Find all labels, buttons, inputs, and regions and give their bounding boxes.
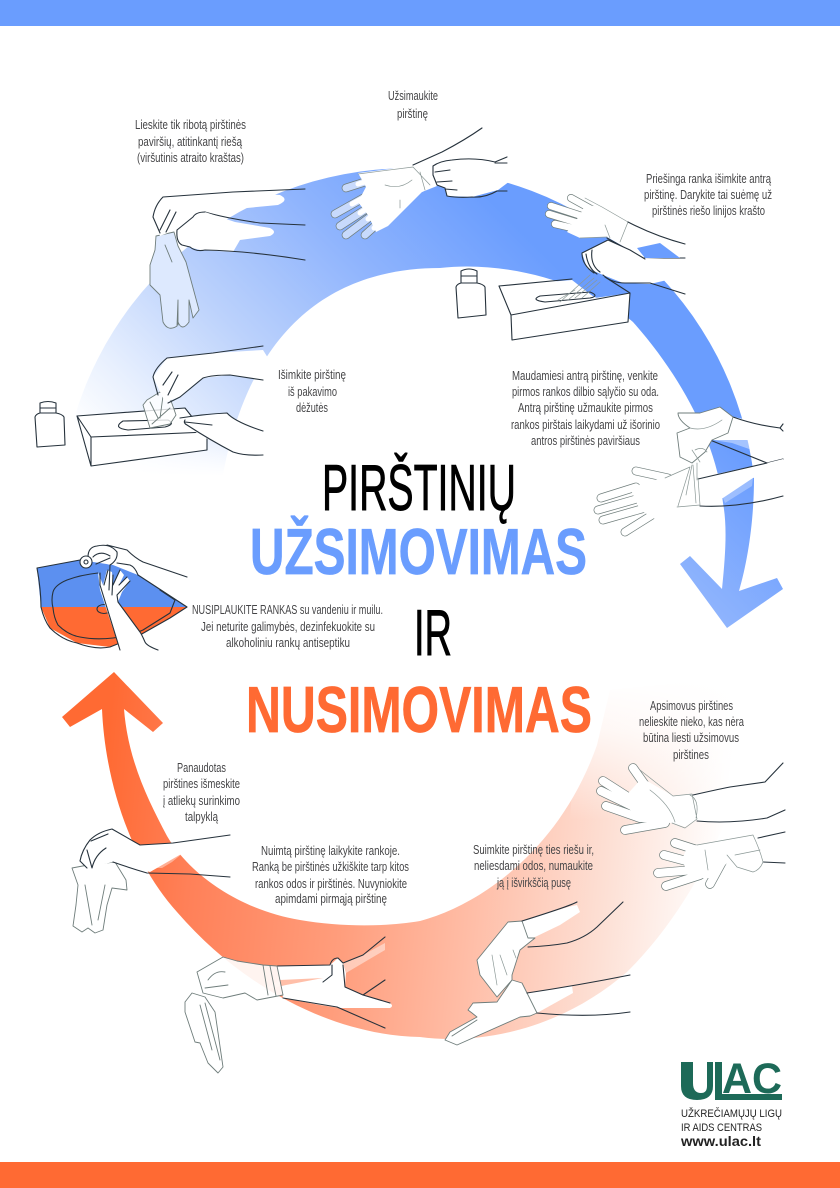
step: touch limited surface [135, 118, 305, 328]
caption: apimdami pirmąją pirštinę [275, 892, 387, 906]
icon: gloved fingers [335, 181, 396, 235]
icon: washing hand [98, 565, 158, 650]
icon: hanging glove [150, 232, 199, 328]
caption: rankos odos ir pirštinės. Nuvyniokite [255, 877, 407, 891]
caption [252, 844, 409, 906]
icon: bottle [35, 402, 65, 447]
caption: Ranką be pirštinės užkiškite tarp kitos [252, 860, 409, 874]
caption [163, 761, 240, 824]
title line: NUSIMOVIMAS: NUSIMOVIMAS [246, 673, 592, 746]
logo text [680, 1107, 782, 1149]
icon: bottle [456, 269, 486, 318]
caption: Apsimovus pirštines [650, 699, 733, 713]
step: second glove on [511, 369, 783, 532]
bottom bar [0, 1162, 840, 1188]
caption [473, 843, 594, 890]
caption [278, 368, 346, 415]
icon: lower forearm [698, 459, 783, 506]
caption: Užsimaukite [388, 89, 438, 103]
icon: lower hand [177, 212, 305, 260]
logo text: www.ulac.lt [680, 1133, 761, 1149]
caption: pirštines išmeskite [163, 777, 240, 791]
caption [511, 369, 660, 448]
caption: į atliekų surinkimo [163, 794, 240, 808]
caption: pirštinės riešo linijos krašto [652, 204, 765, 218]
icon: hand drawing glove [582, 240, 702, 294]
icon: gloved palm [358, 166, 434, 232]
top bar [0, 0, 840, 26]
caption: Priešinga ranka išimkite antrą [646, 172, 771, 186]
orange arrow: taking gloves off [62, 672, 760, 1039]
blue arrow: putting gloves on [62, 168, 783, 628]
caption [639, 699, 744, 762]
title [246, 451, 592, 746]
icon: sink [37, 560, 187, 648]
caption: dėžutės [296, 401, 328, 415]
icon: upper arm [693, 763, 785, 823]
caption: neliesdami odos, numaukite [474, 859, 593, 873]
icon: gloves bundle [72, 862, 127, 933]
icon: glove details [358, 167, 430, 208]
step: peel off glove [185, 844, 409, 1073]
icon: upper gloved hand [601, 768, 697, 830]
caption: ją į išvirkščią pusę [496, 876, 571, 890]
caption: Jei neturite galimybės, dezinfekuokite su [201, 620, 375, 634]
step: discard gloves [72, 761, 240, 933]
caption: (viršutinis atraito kraštas) [137, 151, 244, 165]
caption: talpyklą [185, 810, 218, 824]
caption: pirmos rankos dilbio sąlyčio su oda. [512, 385, 659, 399]
step: take glove from box [35, 346, 346, 466]
caption: nelieskite nieko, kas nėra [639, 715, 744, 729]
icon: hanging glove [185, 993, 223, 1073]
caption [644, 172, 772, 218]
icon: lower gloved hand [658, 835, 763, 886]
title line: IR: IR [414, 596, 452, 669]
icon: forearm [413, 128, 488, 192]
icon: hand holding gloves [80, 829, 230, 877]
icon: lower hand and arm [445, 975, 630, 1045]
step: do not touch anything [601, 699, 785, 886]
logo text: IR AIDS CENTRAS [681, 1122, 762, 1134]
icon: lower arm [755, 832, 785, 863]
icon: fist of other hand [433, 157, 519, 197]
icon: gloved hand [549, 198, 685, 259]
logo mark: AC [722, 1055, 782, 1103]
logo text: UŽKREČIAMŲJŲ LIGŲ [681, 1107, 782, 1120]
caption [192, 603, 383, 650]
icon: crumpled glove [143, 392, 176, 428]
icon: glove box [499, 277, 630, 340]
logo: ULAC [680, 1055, 782, 1149]
caption: paviršių, atitinkantį riešą [138, 135, 242, 149]
caption: Antrą pirštinę užmaukite pirmos [518, 401, 653, 415]
caption: pirštinę. Darykite tai suėmę už [644, 188, 772, 202]
caption: Suimkite pirštinę ties riešu ir, [473, 843, 594, 857]
caption: alkoholiniu rankų antiseptiku [226, 636, 350, 650]
caption: Maudamiesi antrą pirštinę, venkite [512, 369, 658, 383]
icon: lower hand on box [180, 413, 263, 455]
caption: būtina liesti užsimovus [643, 731, 739, 745]
step: grasp glove at wrist [445, 843, 630, 1045]
caption: Išimkite pirštinę [278, 368, 346, 382]
icon: upper forearm [710, 415, 783, 463]
icon: lower gloved hand [598, 463, 700, 532]
icon: upper hand and arm [477, 902, 623, 997]
icon: upper hand [153, 189, 305, 236]
icon: gloved hand [197, 957, 283, 1000]
caption: pirštines [673, 748, 709, 762]
icon: upper gloved fist [677, 407, 733, 463]
caption: rankos pirštais laikydami už išorinio [511, 418, 660, 432]
icon: blue patch behind arm [637, 243, 680, 258]
caption: Nuimtą pirštinę laikykite rankoje. [261, 844, 400, 858]
caption: NUSIPLAUKITE RANKAS su vandeniu ir muilu. [192, 603, 383, 617]
icon: faucet and arm [80, 545, 187, 577]
title line: UŽSIMOVIMAS: UŽSIMOVIMAS [250, 515, 587, 588]
icon: bare hand [263, 937, 392, 1028]
step: put on glove [335, 89, 519, 235]
icon: upper hand picking glove [153, 346, 268, 403]
caption: antros pirštinės paviršiaus [531, 434, 640, 448]
icon: glove box [77, 408, 207, 466]
title line: PIRŠTINIŲ: PIRŠTINIŲ [322, 451, 516, 524]
caption [388, 89, 438, 121]
caption: iš pakavimo [288, 385, 337, 399]
caption: Panaudotas [177, 761, 226, 775]
icon: glove pulled out [558, 275, 600, 302]
step: wash hands [37, 545, 383, 650]
step: take second glove [456, 172, 772, 340]
caption: Lieskite tik ribotą pirštinės [135, 118, 246, 132]
caption [135, 118, 246, 165]
caption: pirštinę [397, 107, 428, 121]
